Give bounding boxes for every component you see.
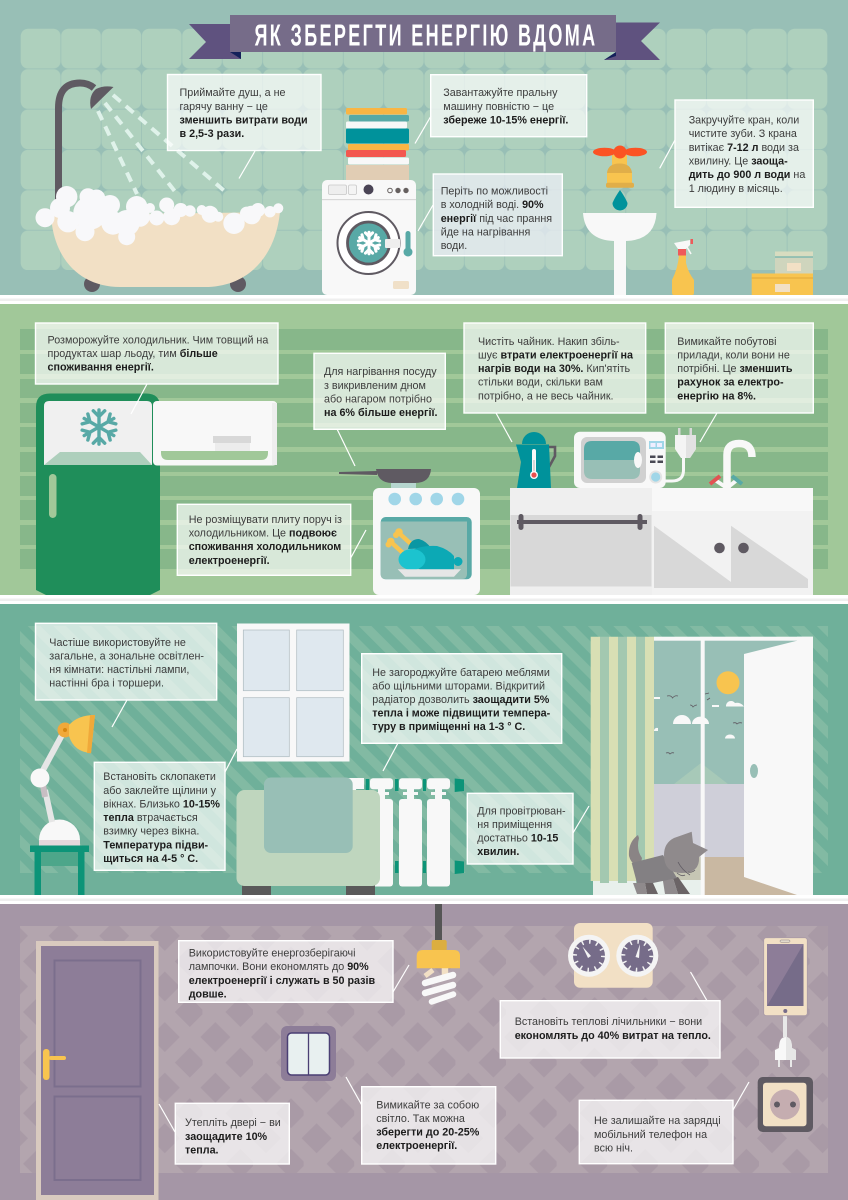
callout: phone charging: Не залишайте на зарядці (594, 1115, 721, 1127)
illustration: curtain (591, 637, 654, 895)
callout: do not block radiator: туру в приміщенні на 1-3 ° С. (372, 721, 525, 733)
callout: cold water washing: в холодній воді. 90% (441, 199, 544, 211)
illustration: fridge (36, 394, 160, 595)
callout: turn off tap (660, 100, 813, 207)
chicken (386, 528, 462, 577)
callout: stove placement: електроенергії. (189, 555, 270, 567)
callout: do not block radiator (362, 654, 562, 771)
callout: turn off tap: хвилину. Це заоща- (689, 156, 788, 168)
callout: unplug appliances: прилади, коли вони не (677, 350, 790, 362)
callout: full washing load: Завантажуйте пральну (443, 87, 558, 99)
illustration: door (36, 941, 158, 1200)
callout: unplug appliances: Вимикайте побутові (677, 336, 777, 348)
callout: phone charging: мобільний телефон на (594, 1129, 707, 1141)
callout: do not block radiator: радіатор дозволить заощадити 5% (372, 694, 549, 706)
illustration: stack of towels (346, 108, 409, 181)
callout: switch off light: світло. Так можна (376, 1113, 465, 1125)
callout: ventilation: достатньо 10-15 (477, 832, 558, 844)
callout: turn off tap: 1 людину в місяць. (689, 183, 783, 195)
callout: switch off light (346, 1077, 496, 1164)
callout: stove placement: споживання холодильником (189, 541, 341, 553)
callout: cold water washing: Періть по можливості (441, 186, 548, 198)
illustration: window (237, 624, 350, 762)
callout: unplug appliances: рахунок за електро- (677, 376, 784, 388)
callout: zonal lighting: загальне, а зональне освітлен- (49, 650, 204, 662)
callout: zonal lighting: настінні бра і торшери. (49, 678, 164, 690)
icon: snowflake (358, 232, 380, 254)
callout: shower (168, 74, 321, 178)
clouds (654, 697, 744, 738)
illustration: heat meters (568, 923, 658, 988)
callout: stove placement: Не розміщувати плиту поруч із (189, 514, 342, 526)
illustration: kitchen counter (510, 488, 813, 595)
callout: turn off tap: дить до 900 л води на (689, 169, 805, 181)
callout: defrost fridge (36, 323, 278, 414)
illustration: faucet (710, 444, 752, 488)
callout: insulate door: заощадите 10% (185, 1131, 268, 1143)
callout: energy saving bulbs (179, 941, 409, 1002)
callout: ventilation: хвилин. (477, 846, 519, 858)
icon: snowflake (81, 410, 117, 444)
callout: switch off light: Вимикайте за собою (376, 1100, 479, 1112)
callout: unplug appliances (665, 323, 813, 442)
callout: stove placement (177, 504, 366, 575)
callout: turn off tap: Закручуйте кран, коли (689, 114, 799, 126)
callout: stove placement: холодильником. Це подвоює (189, 528, 337, 540)
callout: energy saving bulbs: Використовуйте енергозберігаючі (189, 948, 356, 960)
illustration: light bulb (417, 904, 460, 1002)
callout: zonal lighting: ня кімнати: настільні лампи, (49, 664, 189, 676)
callout: descale kettle: шує втрати електроенергії на (478, 350, 633, 362)
callout: window sealing: Температура підви- (103, 840, 209, 852)
title banner (189, 15, 660, 60)
callout: window sealing: Встановіть склопакети (103, 771, 216, 783)
callout: phone charging (579, 1082, 749, 1164)
callout: cold water washing: води. (441, 240, 467, 252)
floor strips (0, 295, 848, 904)
illustration: air conditioner (153, 401, 277, 466)
callout: shower: зменшить витрати води (180, 114, 308, 126)
callout: warped pots: на 6% більше енергії. (324, 407, 437, 419)
title: ЯК ЗБЕРЕГТИ ЕНЕРГІЮ ВДОМА (254, 18, 598, 52)
callout: ventilation (467, 793, 589, 864)
callout: cold water washing (418, 174, 562, 256)
callout: switch off light: зберегти до 20-25% (376, 1126, 480, 1138)
callout: window sealing: тепла втрачається (103, 812, 198, 824)
callout: switch off light: електроенергії. (376, 1140, 457, 1152)
callout: descale kettle: нагрів води на 30%. Кип'ятіть (478, 363, 630, 375)
callout: descale kettle: Чистіть чайник. Накип збіль- (478, 336, 620, 348)
callout: shower: Приймайте душ, а не (180, 87, 286, 99)
callout: defrost fridge: продуктах шар льоду, тим більше (48, 348, 218, 360)
callout: do not block radiator: або щільними шторами. Відкритий (372, 680, 545, 692)
callout: defrost fridge: Розморожуйте холодильник. Чим товщий на (48, 334, 268, 346)
illustration: light switch (281, 1026, 336, 1081)
illustration: phone with charger (764, 938, 807, 1067)
callout: warped pots: або нагаром потрібно (324, 394, 432, 406)
callout: shower: гарячу ванну − це (180, 101, 268, 113)
callout: insulate door (159, 1103, 289, 1164)
callout: descale kettle: стільки води, скільки вам (478, 376, 603, 388)
callout: insulate door: тепла. (185, 1144, 219, 1156)
illustration: stove with pan and chicken (339, 469, 480, 595)
callout: cold water washing: йде на нагрівання (441, 227, 530, 239)
illustration: balcony door with view (654, 637, 813, 895)
callout: unplug appliances: енергію на 8%. (677, 390, 756, 402)
callout: warped pots (314, 353, 445, 466)
callout: descale kettle (464, 323, 646, 442)
illustration: kettle (516, 432, 555, 488)
callout: warped pots: з викривленим дном (324, 380, 426, 392)
callout: zonal lighting (36, 623, 217, 727)
illustration: spray bottle (672, 239, 694, 295)
callout: insulate door: Утепліть двері − ви (185, 1117, 281, 1129)
callout: heat meters: Встановіть теплові лічильники − вони (515, 1016, 702, 1028)
callout: energy saving bulbs: довше. (189, 988, 227, 1000)
callout: full washing load (415, 75, 587, 144)
callout: energy saving bulbs: електроенергії і служать в 50 разів (189, 975, 376, 987)
callout: heat meters (500, 972, 720, 1058)
illustration: plug and cable (664, 428, 696, 481)
callout: turn off tap: чистите зуби. З крана (689, 128, 797, 140)
section: living room background (0, 604, 848, 895)
callout: unplug appliances: потрібні. Це зменшить (677, 363, 792, 375)
callout: full washing load: машину повністю − це (443, 101, 554, 113)
callout: window sealing: щиться на 4-5 ° С. (103, 853, 198, 865)
callout: defrost fridge: споживання енергії. (48, 362, 154, 374)
section: bathroom background (0, 0, 848, 295)
callout: turn off tap: витікає 7-12 л води за (689, 142, 799, 154)
illustration: armchair (236, 778, 380, 895)
callout: phone charging: всю ніч. (594, 1142, 633, 1154)
icon: water drop (612, 190, 628, 210)
callout: window sealing: взимку через вікна. (103, 826, 199, 838)
illustration: washing machine (322, 180, 416, 295)
illustration: radiator (341, 778, 464, 886)
illustration: cat (629, 832, 708, 894)
callout: window sealing (94, 749, 237, 870)
birds (666, 693, 742, 754)
section: hallway background (0, 904, 848, 1200)
callout: window sealing: вікнах. Близько 10-15% (103, 798, 220, 810)
callout: warped pots: Для нагрівання посуду (324, 366, 437, 378)
section: kitchen background (0, 304, 848, 595)
callout: full washing load: збереже 10-15% енергії. (443, 114, 568, 126)
illustration: microwave (574, 432, 666, 488)
illustration: shower and bathtub (36, 83, 283, 292)
callout: zonal lighting: Частіше використовуйте не (49, 637, 186, 649)
callout: descale kettle: потрібно, а не весь чайник. (478, 390, 614, 402)
callout: cold water washing: енергії під час прання (441, 213, 552, 225)
callout: do not block radiator: тепла і може підвищити темпера- (372, 708, 551, 720)
callout: window sealing: або заклейте щілини у (103, 785, 217, 797)
illustration: sink with tap (583, 146, 656, 295)
callout: do not block radiator: Не загороджуйте батарею меблями (372, 667, 550, 679)
illustration: boxes (752, 252, 813, 295)
callout: ventilation: Для провітрюван- (477, 806, 566, 818)
callout: ventilation: ня приміщення (477, 819, 552, 831)
callout: energy saving bulbs: лампочки. Вони економлять до 90% (189, 961, 369, 973)
illustration: desk lamp on table (30, 715, 95, 895)
illustration: wall socket (758, 1077, 813, 1132)
callout: shower: в 2,5-3 рази. (180, 128, 244, 140)
callout: heat meters: економлять до 40% витрат на тепло. (515, 1030, 711, 1042)
